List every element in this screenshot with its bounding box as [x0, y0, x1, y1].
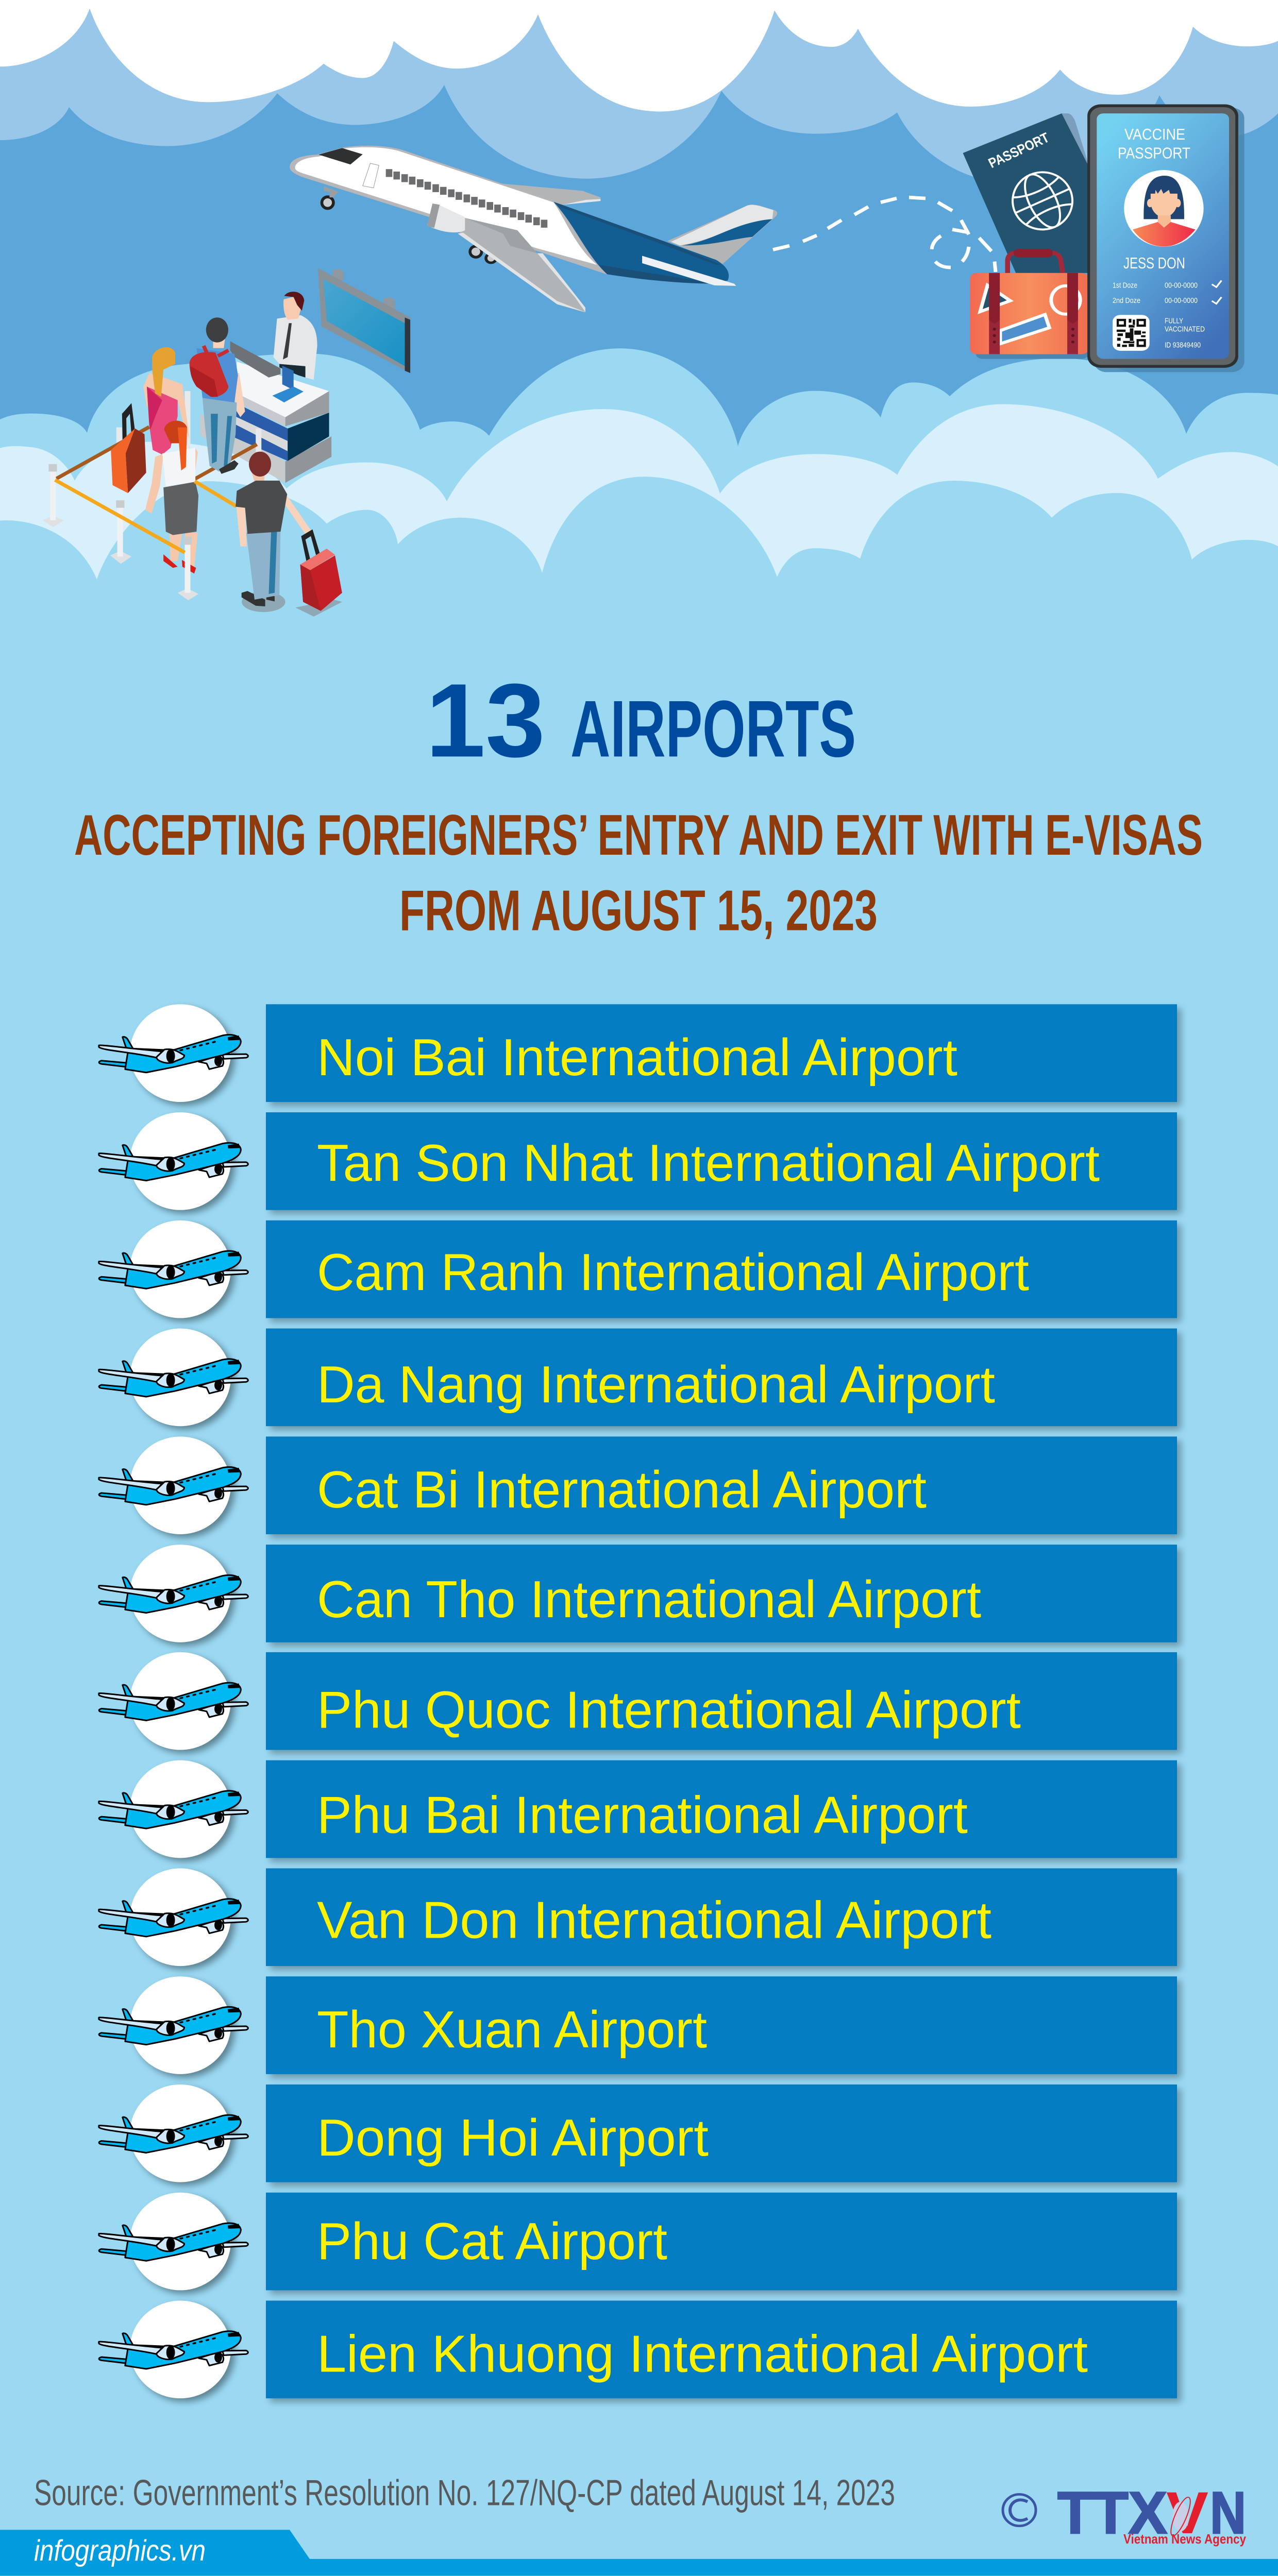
row 2: Tan Son Nhat: [99, 1112, 1181, 1214]
row 11: Dong Hoi: [99, 2084, 1181, 2186]
row 13: Lien Khuong: [99, 2301, 1181, 2402]
footer site name: infographics.vn: [34, 2534, 206, 2567]
orange luggage: [111, 403, 146, 493]
row 11: Dong Hoi: Dong Hoi Airport: [317, 2108, 709, 2166]
subtitle: [74, 803, 1203, 943]
row 8: Phu Bai: Phu Bai International Airport: [317, 1786, 968, 1844]
passport on counter: [272, 366, 304, 402]
first dose label: 1st Doze: [1113, 282, 1137, 290]
row 3: Cam Ranh: Cam Ranh International Airport: [317, 1243, 1029, 1301]
cloud: lower back layer: [0, 348, 1278, 691]
passport cover label: PASSPORT: [986, 129, 1052, 171]
phone heading: VACCINE: [1124, 126, 1185, 143]
row 8: Phu Bai: [99, 1760, 1181, 1862]
logo: TTXVN: [1003, 2480, 1246, 2547]
stanchions and ropes front: [43, 464, 237, 600]
row 1: Noi Bai: Noi Bai International Airport: [317, 1028, 957, 1087]
row 4: Da Nang: Da Nang International Airport: [317, 1355, 995, 1414]
vaccination status: FULLY: [1165, 317, 1183, 325]
passenger in white top: [145, 420, 198, 573]
check-in counter: [200, 362, 331, 483]
row 9: Van Don: Van Don International Airport: [317, 1891, 991, 1949]
letter N: N: [1210, 2480, 1246, 2546]
row 5: Cat Bi: [99, 1436, 1181, 1538]
agency name: Vietnam News Agency: [1123, 2532, 1246, 2547]
cloud: lower front layer: [0, 477, 1278, 691]
phone holder name: JESS DON: [1123, 255, 1185, 272]
row 12: Phu Cat: [99, 2193, 1181, 2294]
row 7: Phu Quoc: Phu Quoc International Airport: [317, 1680, 1021, 1739]
illustration: phone with vaccine passport: [1087, 104, 1245, 372]
title: 13 airports: [426, 662, 856, 778]
passenger with red luggage: [236, 452, 342, 617]
icon: globe emblem: [1167, 2496, 1194, 2538]
icon: globe: [1003, 163, 1082, 239]
row 3: Cam Ranh: [99, 1221, 1181, 1322]
subtitle line 2: FROM AUGUST 15, 2023: [399, 879, 878, 943]
arrow: dashed flight path: [773, 197, 996, 272]
footer area: [0, 2472, 1278, 2576]
cloud: top white layer: [0, 0, 1278, 111]
row 13: Lien Khuong: Lien Khuong International Airport: [317, 2324, 1088, 2383]
passenger with backpack: [190, 317, 245, 474]
word airports: AIRPORTS: [570, 684, 856, 774]
row 10: Tho Xuan: Tho Xuan Airport: [317, 2000, 707, 2059]
airport list: [99, 1004, 1181, 2402]
row 2: Tan Son Nhat: Tan Son Nhat International Airport: [317, 1133, 1100, 1192]
number 13: 13: [426, 662, 545, 778]
vaccination status line 2: VACCINATED: [1165, 326, 1205, 334]
row 10: Tho Xuan: [99, 1976, 1181, 2078]
illustration: check-in desk and passengers: [43, 268, 410, 617]
row 7: Phu Quoc: [99, 1652, 1181, 1754]
row 9: Van Don: [99, 1868, 1181, 1970]
row 12: Phu Cat: Phu Cat Airport: [317, 2212, 667, 2270]
check-in officer: [274, 292, 317, 380]
illustration: airplane taking off: [290, 146, 777, 313]
row 1: Noi Bai: [99, 1004, 1181, 1106]
stanchions and ropes back: [57, 391, 259, 479]
counter screen: [230, 341, 280, 378]
source note: Source: Government’s Resolution No. 127/NQ-CP dated August 14, 2023: [34, 2472, 895, 2514]
row 6: Can Tho: Can Tho International Airport: [317, 1570, 981, 1628]
copyright symbol: [1003, 2495, 1036, 2526]
letter V: V: [1166, 2480, 1208, 2546]
agency letters: TTX: [1057, 2480, 1167, 2546]
second dose date: 00-00-0000: [1165, 297, 1198, 305]
phone heading line 2: PASSPORT: [1118, 144, 1190, 162]
row 4: Da Nang: [99, 1329, 1181, 1430]
cloud: upper mid-blue layer: [0, 0, 1278, 185]
second dose label: 2nd Doze: [1113, 297, 1140, 305]
id number: ID 93849490: [1165, 342, 1201, 349]
passenger in pink dress: [143, 347, 190, 454]
cloud: lower light layer: [0, 404, 1278, 691]
illustration: suitcase: [970, 249, 1088, 359]
sky background: [0, 0, 1278, 691]
row 6: Can Tho: [99, 1545, 1181, 1646]
footer bar: [0, 2530, 1278, 2576]
first dose date: 00-00-0000: [1165, 282, 1198, 290]
row 5: Cat Bi: Cat Bi International Airport: [317, 1460, 927, 1519]
illustration: passport: [963, 113, 1089, 273]
icon: flight information monitor: [318, 268, 410, 373]
